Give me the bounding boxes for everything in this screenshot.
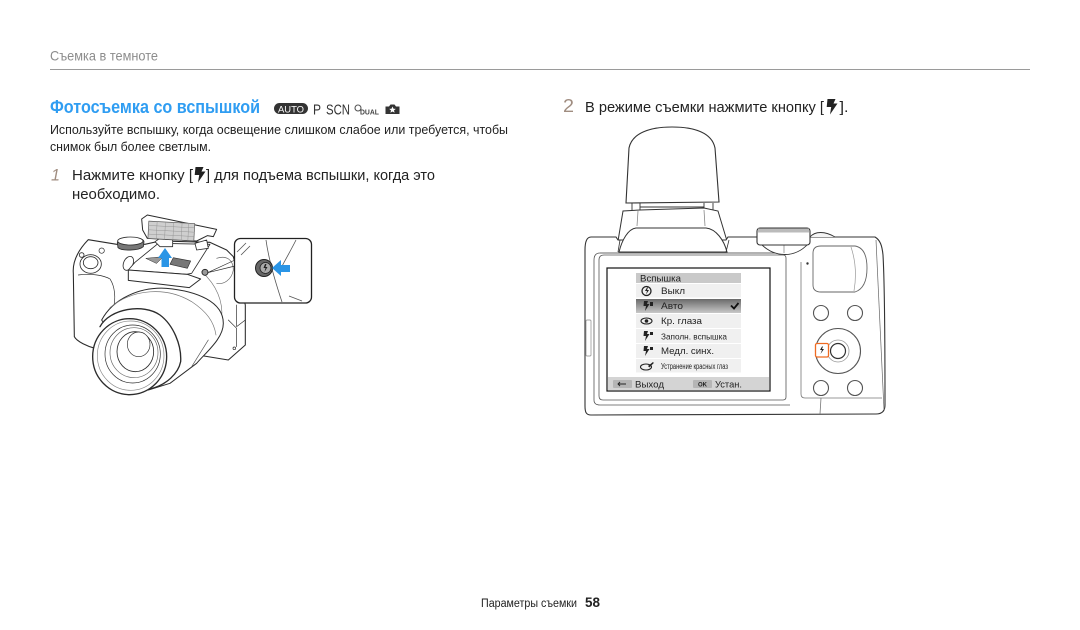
blue arrow: flash raised	[158, 248, 172, 267]
step 2 text: ].	[840, 99, 848, 116]
popup flash	[626, 127, 719, 203]
menu labels: Медл. синх.	[661, 346, 714, 357]
flash head	[155, 238, 208, 250]
top dial	[810, 232, 835, 237]
lens barrel	[102, 288, 223, 390]
mode icons: P	[313, 102, 321, 118]
mode icons: SCN	[326, 102, 350, 118]
step 1 text: необходимо.	[72, 186, 160, 203]
intro paragraph: Используйте вспышку, когда освещение слишком слабое или требуется, чтобы	[50, 123, 508, 137]
viewfinder hump	[618, 208, 727, 241]
menu rows	[636, 284, 741, 298]
right column controls	[801, 262, 882, 414]
menu labels	[661, 286, 728, 371]
illustration: front camera with raised flash	[73, 215, 245, 395]
shutter button and small buttons	[80, 255, 101, 273]
step 1 text: ] для подъема вспышки, когда это	[206, 167, 435, 184]
menu header	[636, 273, 741, 283]
inset: flash button detail	[234, 238, 312, 303]
intro paragraph: снимок был более светлым.	[50, 140, 211, 154]
camera LCD screen: Выход	[635, 380, 664, 390]
camera back body	[585, 237, 885, 415]
step 1 text: Нажмите кнопку [	[72, 167, 194, 184]
mode icons: AUTO	[278, 104, 304, 115]
mode icons	[274, 102, 400, 118]
step 2 text: В режиме съемки нажмите кнопку [	[585, 99, 825, 116]
mode dial	[117, 238, 144, 250]
flash button on body	[202, 269, 208, 275]
step 1 text	[72, 167, 435, 203]
step 2 number: 2	[563, 96, 574, 116]
mode icons: DUAL	[360, 110, 380, 116]
step 1 number: 1	[51, 166, 60, 184]
camera LCD screen	[607, 268, 770, 391]
menu labels: Выкл	[661, 286, 685, 297]
blue arrow: press button	[272, 260, 290, 276]
buttons	[814, 306, 828, 320]
camera body	[73, 240, 245, 362]
menu icons	[640, 286, 654, 370]
bottom soft-key bar	[608, 377, 769, 390]
footer: section name: Параметры съемки	[481, 598, 577, 610]
menu labels: Кр. глаза	[661, 316, 703, 327]
illustration: camera back with menu	[585, 127, 885, 415]
lens front	[93, 319, 167, 395]
menu labels: Авто	[661, 301, 683, 312]
thumb grip	[813, 246, 867, 292]
camera LCD screen: Вспышка	[640, 274, 682, 284]
screen frame	[599, 255, 786, 400]
pointer lines to inset	[208, 260, 235, 273]
menu labels: Устранение красных глаз	[661, 362, 728, 371]
menu labels: Заполн. вспышка	[661, 332, 727, 342]
section heading: Съемка в темноте	[50, 48, 158, 64]
flash bay	[128, 243, 210, 274]
d-pad	[816, 328, 860, 374]
camera LCD screen: Устан.	[715, 380, 742, 390]
flash key highlight	[816, 344, 828, 357]
intro paragraph	[50, 123, 508, 154]
footer: page number: 58	[585, 595, 600, 610]
camera LCD screen: OK	[698, 383, 708, 389]
title: Фотосъемка со вспышкой	[50, 97, 260, 117]
